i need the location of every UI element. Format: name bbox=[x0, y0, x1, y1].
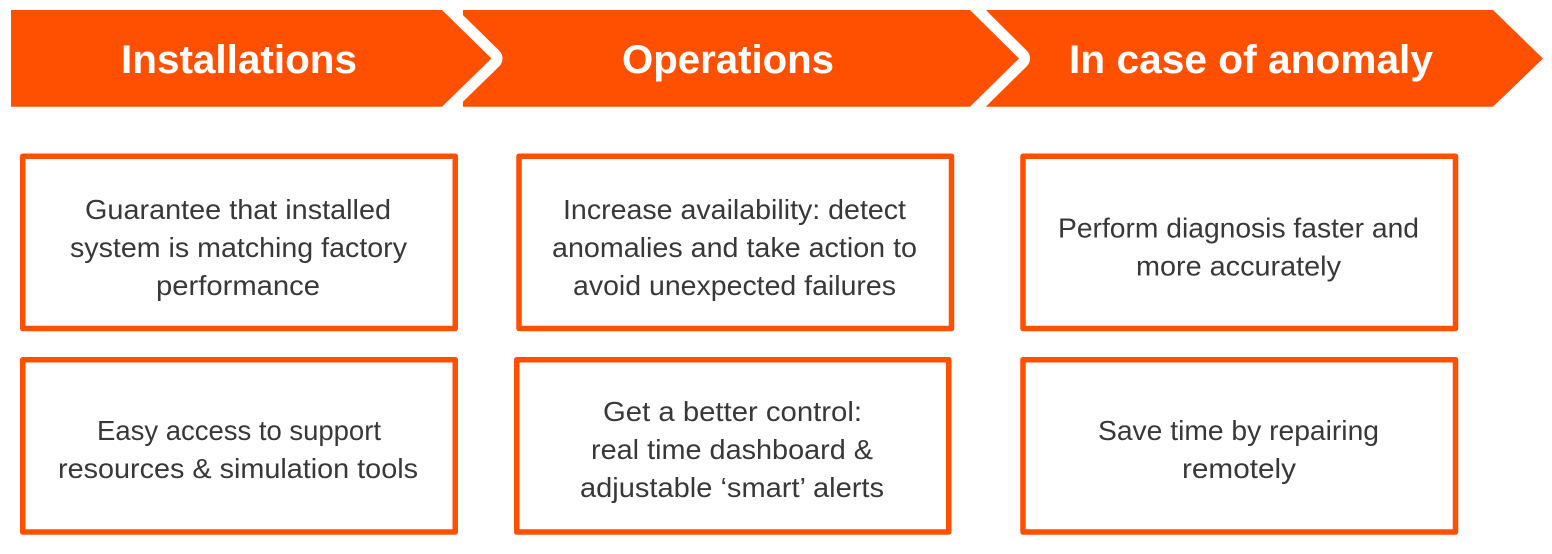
panel: increase availability: anomalies and take action to bbox=[552, 232, 917, 263]
panel: guarantee factory performance bbox=[23, 156, 455, 328]
panel: increase availability bbox=[519, 156, 952, 328]
header chevron: Operations bbox=[463, 10, 1019, 107]
header chevron: Operations: Operations bbox=[622, 38, 834, 82]
panel: better control: adjustable ‘smart’ alerts bbox=[580, 472, 884, 503]
panel: save time repairing remotely: remotely bbox=[1182, 453, 1296, 484]
header chevron: Installations bbox=[11, 10, 492, 107]
panel: increase availability: Increase availability: detect bbox=[563, 194, 906, 225]
panel: perform diagnosis faster: more accurately bbox=[1136, 250, 1341, 282]
panel: increase availability: avoid unexpected failures bbox=[573, 270, 896, 301]
panel: easy access to resources bbox=[23, 360, 455, 532]
panel: better control bbox=[517, 360, 949, 532]
panel: guarantee factory performance: performance bbox=[156, 270, 320, 301]
panel: better control: real time dashboard & bbox=[591, 434, 873, 465]
panel: save time repairing remotely: Save time by repairing bbox=[1098, 415, 1379, 446]
panel: guarantee factory performance: Guarantee that installed bbox=[85, 194, 391, 225]
header chevron: In case of anomaly bbox=[986, 10, 1543, 107]
header chevron: In case of anomaly: In case of anomaly bbox=[1069, 38, 1434, 82]
panel: save time repairing remotely bbox=[1023, 360, 1456, 532]
panel: easy access to resources: Easy access to support bbox=[97, 415, 381, 446]
panel: guarantee factory performance: system is matching factory bbox=[70, 232, 407, 263]
panel: perform diagnosis faster bbox=[1023, 156, 1456, 328]
panel: better control: Get a better control: bbox=[603, 396, 862, 427]
panel: perform diagnosis faster: Perform diagnosis faster and bbox=[1058, 212, 1419, 244]
panel: easy access to resources: resources & simulation tools bbox=[58, 453, 418, 484]
header chevron: Installations: Installations bbox=[121, 38, 357, 82]
